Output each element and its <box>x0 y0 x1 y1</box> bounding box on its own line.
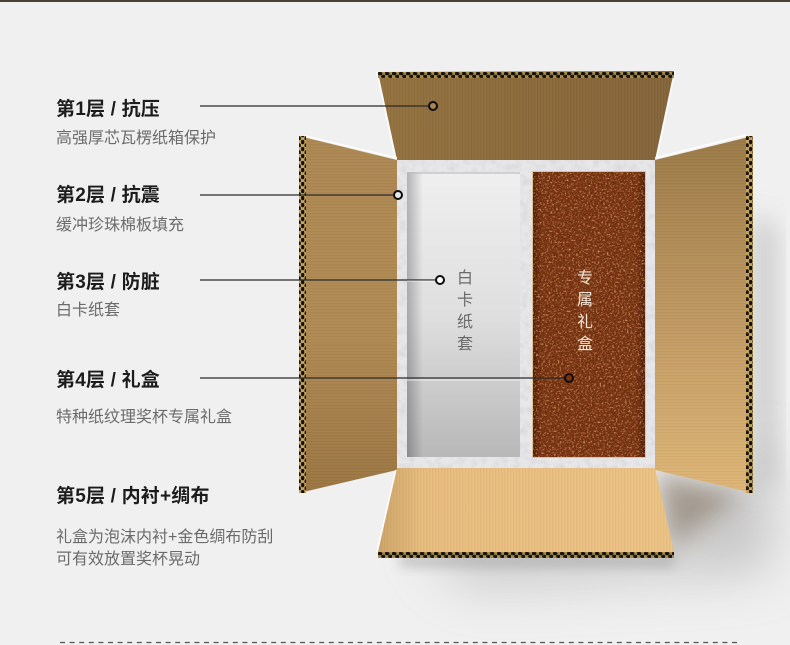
bottom flap <box>377 468 674 558</box>
layer 4 pointer <box>200 374 573 382</box>
layer 1 pointer <box>200 102 437 110</box>
layer 1 text: 高强厚芯瓦楞纸箱保护 <box>56 129 216 147</box>
label: exclusive gift box: 盒 <box>577 335 593 353</box>
layer 5 text: 第5层 / 内衬+绸布 <box>56 485 210 507</box>
label: exclusive gift box: 礼 <box>577 313 593 331</box>
layer 3 text: 白卡纸套 <box>56 301 120 319</box>
layer 2 text: 第2层 / 抗震 <box>56 183 160 206</box>
layer 2 pointer <box>200 191 402 199</box>
layer 5 text: 礼盒为泡沫内衬+金色绸布防刮 <box>56 528 273 546</box>
label: white card sleeve: 套 <box>457 335 473 353</box>
right flap <box>655 135 753 493</box>
top flap <box>377 71 675 160</box>
foam filling <box>397 160 655 468</box>
layer 5 text: 可有效放置奖杯晃动 <box>56 550 200 568</box>
layer 2 text <box>56 183 184 234</box>
label: white card sleeve: 卡 <box>457 291 473 309</box>
layer 2 text: 缓冲珍珠棉板填充 <box>56 216 184 234</box>
layer 5 text <box>56 485 273 568</box>
layer 3 text <box>56 270 160 319</box>
label: white card sleeve <box>457 269 473 353</box>
layer 4 text <box>56 368 232 426</box>
label: white card sleeve: 纸 <box>457 313 473 331</box>
layer 3 pointer <box>200 276 444 284</box>
brown gift box <box>532 171 646 458</box>
layer 4 text: 特种纸纹理奖杯专属礼盒 <box>56 408 232 426</box>
layer 1 text: 第1层 / 抗压 <box>56 97 160 120</box>
layer 3 text: 第3层 / 防脏 <box>56 270 160 293</box>
label: white card sleeve: 白 <box>457 269 473 287</box>
top edge band <box>0 0 790 2</box>
label: exclusive gift box <box>577 269 593 353</box>
white card sleeve <box>407 172 520 457</box>
layer 4 text: 第4层 / 礼盒 <box>56 368 160 391</box>
box drop shadow <box>400 210 775 585</box>
layer 1 text <box>56 97 216 147</box>
label: exclusive gift box: 专 <box>577 269 593 287</box>
label: exclusive gift box: 属 <box>577 292 593 309</box>
left flap <box>299 136 397 493</box>
open cardboard box <box>299 71 753 558</box>
